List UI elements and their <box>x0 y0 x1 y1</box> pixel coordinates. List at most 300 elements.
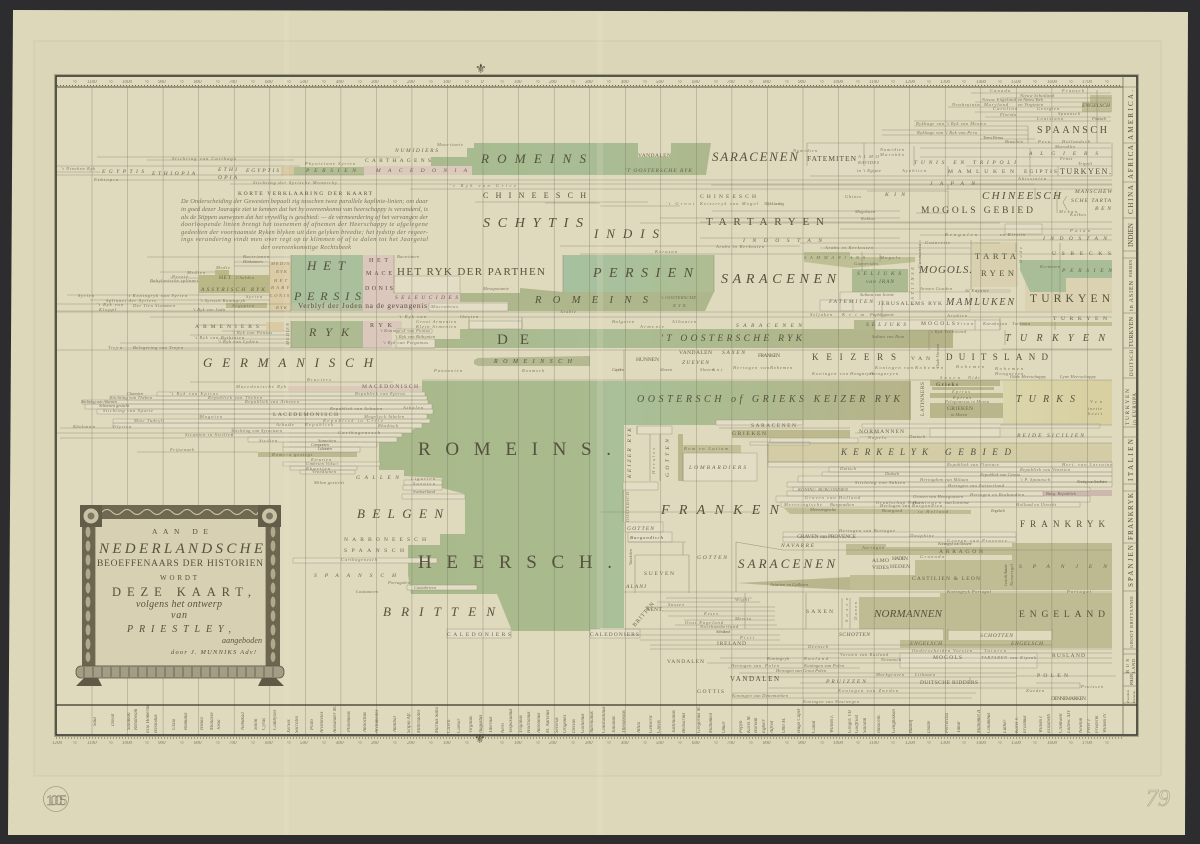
region names: Asia rows: RYK <box>370 323 393 329</box>
bottom time scale: ½ <box>643 741 647 746</box>
top time scale: ½ <box>820 80 824 85</box>
region names: west Europe: MOGOLS <box>933 655 962 661</box>
block: Persis Ryk lower <box>291 321 363 348</box>
America labels: Louisiana <box>1036 116 1064 121</box>
region names: Africa row: Ethiopia <box>93 177 119 182</box>
region names: Africa row: OPIA <box>218 175 238 181</box>
region names: Europe upper rows: Stichting van Sparte <box>103 408 153 413</box>
region names: west Europe: Merovingische <box>809 507 836 512</box>
block: Aragon <box>846 544 1012 555</box>
region names: west Europe: Lithauen <box>914 672 936 677</box>
region names: Asia rows: Krim <box>841 312 865 317</box>
right column of geographic divisions: AMERICA. <box>1127 90 1135 140</box>
block: Castilien <box>850 560 1012 590</box>
region names: Asia rows: Arabie <box>559 309 576 314</box>
region names: Africa row: ROMEINS <box>480 151 586 166</box>
block: Persien <box>563 255 714 292</box>
pencil inventory stamp: 1005: 1005 <box>46 793 67 809</box>
region names: west Europe: Tataren <box>984 648 1007 653</box>
bottom band: names of rulers and scholars: Origenes <box>563 715 568 733</box>
America labels: Hollandsch <box>1061 139 1091 144</box>
region names: west Europe: 't P. Spaansch <box>1020 477 1051 482</box>
region names: west Europe: Graafschap Namen <box>876 500 925 505</box>
region names: Asia rows: CHINEESCH <box>700 194 756 200</box>
region names: Europe upper rows: Rhodisch <box>377 423 399 428</box>
region names: Asia rows: TURKYEN <box>1030 293 1111 305</box>
base gadroons <box>84 667 273 677</box>
region names: Europe upper rows: NARBONEESCH <box>344 537 426 543</box>
region names: Africa row: Numidien <box>879 147 905 152</box>
region names: Europe upper rows: Peloponesus in Morea <box>944 399 990 404</box>
bottom time scale: ½ <box>714 741 718 746</box>
America labels: Rykhage van 't Ryk van Mexico <box>915 121 987 126</box>
bottom time scale: 600 <box>692 741 700 746</box>
region names: Asia rows: Sultan van Rum <box>872 334 905 339</box>
region names: Europe upper rows: Pannonien <box>433 368 463 373</box>
region names: west Europe: Essex <box>703 611 718 616</box>
block: Kerkelyk Gebied <box>768 443 1112 462</box>
region names: Asia rows: Mogols <box>879 255 900 260</box>
dedication text: NEDERLANDSCHE <box>98 541 263 557</box>
region names: Asia rows: Syrien <box>78 293 95 298</box>
cartouche base <box>76 666 284 678</box>
region names: Europe upper rows: Bohemen <box>995 366 1024 371</box>
bottom band: names of rulers and scholars: Romulus <box>184 712 189 731</box>
America labels: Fransch <box>1091 116 1107 121</box>
region names: Asia rows: TURKYEN <box>1053 316 1107 322</box>
block: Persien Africa <box>294 167 364 175</box>
bottom band: names of rulers and scholars: Salomon <box>127 712 132 730</box>
block: Macedonisch pink <box>288 386 422 391</box>
region names: Africa row: ETHIOPIA <box>151 171 196 177</box>
bottom band: names of rulers and scholars: Gregorius M. <box>697 706 702 733</box>
top time scale: ½ <box>856 80 860 85</box>
region names: west Europe: VANDALEN <box>667 659 704 665</box>
region names: Europe upper rows: inetie <box>1088 406 1102 411</box>
frame <box>54 74 1138 738</box>
region names: Europe upper rows: Republiek van Theben <box>207 395 263 400</box>
vertical year lines <box>92 87 1087 735</box>
top time scale: 1700 <box>1082 80 1092 85</box>
right column of geographic divisions: FRANKRYK <box>1127 493 1135 540</box>
region names: Asia rows: TARTA <box>975 251 1017 261</box>
America labels: Rykhage van 't Ryk van Peru <box>916 130 978 135</box>
bottom band: names of rulers and scholars: Attila <box>637 721 642 734</box>
bottom band: names of rulers and scholars: Genghiskan <box>892 709 897 733</box>
region names: west Europe: VIDES <box>872 565 889 571</box>
region names: Europe upper rows: Lusitanieen <box>355 589 379 594</box>
block: Romeins Africa <box>431 143 711 175</box>
colour blocks of the empires <box>199 95 1112 648</box>
region names: Asia rows: Mogolsten <box>854 209 876 214</box>
region names: Asia rows: RYK <box>275 305 288 310</box>
bottom band: names of rulers and scholars: Tiberius <box>489 717 494 733</box>
bottom band: names of rulers and scholars: Justinianus <box>672 710 677 733</box>
dedication text: WORDT <box>160 574 198 582</box>
region names: Europe upper rows: CALEDONIERS <box>590 632 639 638</box>
region names: Asia rows: Patan <box>1069 228 1091 233</box>
America labels: Nieuw Engeland <box>981 97 1017 102</box>
region names: Europe upper rows: Macedonische Ryk <box>235 384 287 389</box>
bottom band: names of rulers and scholars: Augustus <box>479 715 484 734</box>
region names: Africa row: SARACENEN <box>712 149 799 164</box>
bottom band: names of rulers and scholars: Cicero <box>447 719 452 733</box>
region names: Asia rows: MOGOLS <box>921 321 955 327</box>
region names: Asia rows: RYK <box>275 269 288 274</box>
region names: Asia rows: Kloppl <box>98 307 117 312</box>
top time scale: 900 <box>798 80 806 85</box>
bottom time scale: ½ <box>820 741 824 746</box>
region names: Europe upper rows: Carthagenesch <box>338 430 381 435</box>
region names: Asia rows: TARTARYEN <box>706 216 824 228</box>
region names: Africa row: 'T OOSTERSCHE RYK <box>625 168 692 174</box>
region names: Europe upper rows: Venedianen <box>312 469 337 474</box>
bottom band: names of rulers and scholars: David <box>111 713 116 727</box>
region names: west Europe: Portugal <box>1066 589 1092 594</box>
region names: west Europe: HADEN <box>892 556 908 562</box>
bottom band: names of rulers and scholars: Pepyn <box>739 720 744 734</box>
region names: west Europe: Republiek van Venetien <box>1019 467 1071 472</box>
America labels: Terra Firma <box>983 135 1004 140</box>
explanation body: De Onderscheiding der Gewesten bepaalt zig tusschen twee parallele kaplinie-linien; om daar <box>180 198 428 205</box>
bottom time scale: 700 <box>229 741 237 746</box>
region names: west Europe: FRANKEN <box>660 503 780 518</box>
block: Egypt small <box>281 167 294 175</box>
region names: west Europe: Engelsch <box>990 508 1006 513</box>
region names: Asia rows: Armenie <box>639 324 664 329</box>
region names: Asia rows: JERUSALEMS RYK <box>878 301 942 307</box>
block: Normannen Engeland <box>859 593 1112 648</box>
region names: Asia rows: Bulgaren <box>612 319 635 324</box>
top time scale: 1000 <box>122 80 132 85</box>
bottom band: names of rulers and scholars <box>93 705 1108 734</box>
bottom time scale: ½ <box>145 741 149 746</box>
region names: west Europe: Oost Engeland <box>685 620 724 625</box>
right column of geographic divisions: ITALIEN <box>1127 439 1135 481</box>
bottom band: names of rulers and scholars: Karel V. <box>1015 717 1020 734</box>
America labels: Marokko <box>1054 144 1076 149</box>
region names: west Europe <box>625 423 1112 704</box>
region names: Europe upper rows: Portugalen <box>387 580 411 585</box>
block: Spanjen <box>1012 543 1112 590</box>
region names: west Europe: ENGELAND <box>1019 610 1105 620</box>
right column of geographic divisions: POLEN <box>1130 674 1134 685</box>
top time scale: 1600 <box>1047 80 1058 85</box>
bottom time scale: 300 <box>371 741 379 746</box>
region names: Asia rows: 't Ryk Liaoting <box>764 201 785 206</box>
region names: west Europe: SARACENEN <box>751 423 796 429</box>
bottom band: names of rulers and scholars: Otto M. <box>782 717 787 733</box>
region names: Europe upper rows: VAN <box>911 356 930 362</box>
top time scale: 700 <box>727 80 735 85</box>
bottom band: names of rulers and scholars: Julianus <box>612 716 617 733</box>
region names: Europe upper rows: Oude Heerschappy <box>1010 374 1047 379</box>
bottom time scale: ½ <box>429 741 433 746</box>
bottom band: names of rulers and scholars: Egbert <box>762 719 767 734</box>
cartouche: dedication title <box>76 505 284 686</box>
vertical block labels: Leon & Asturie <box>1003 564 1008 587</box>
bottom time scale: 200 <box>407 741 415 746</box>
bottom time scale: ½ <box>1033 741 1037 746</box>
wedge: Asturien <box>737 577 850 590</box>
region names: Asia rows: PERSIEN <box>1061 268 1112 274</box>
right column of geographic divisions: LAND <box>1131 658 1136 673</box>
region names: west Europe: Koningen van Zweden <box>837 688 899 693</box>
pale bars for the smaller states <box>82 224 1112 668</box>
region names: west Europe: TARTAREN van Kipzak <box>981 655 1037 660</box>
region names: Europe upper rows: Sicanien in Sicilien <box>185 432 234 437</box>
region names: west Europe: Hertogen en Brabandten <box>969 492 1025 497</box>
bottom band: names of rulers and scholars: Belisarius <box>682 713 687 733</box>
region names: Asia rows: Medien <box>186 270 206 275</box>
region names: Europe upper rows: OOSTERSCH of GRIEKS KEIZER RYK <box>637 394 901 405</box>
region names: west Europe: NAVARRE <box>780 543 815 549</box>
America labels: Brasilien <box>1005 139 1024 144</box>
region names: Europe upper rows: Hongaryen <box>849 371 875 376</box>
bottom time scale: 1200 <box>52 741 62 746</box>
region names: Europe upper rows: Chamien <box>127 391 144 396</box>
region names: Europe upper rows: Ligurien <box>410 476 436 481</box>
right column of geographic divisions: in EUROPA <box>1133 393 1138 425</box>
right column of geographic divisions: TURKYEN <box>1129 316 1135 347</box>
region names: west Europe: SUEVEN <box>644 571 674 577</box>
region names: Asia rows: Verblyf der Joden na de gevangenis <box>298 301 427 310</box>
region names: Europe upper rows: TURKS <box>1016 394 1075 405</box>
region names: west Europe: GRIEKEN <box>732 431 766 437</box>
bottom band: names of rulers and scholars: Lodew. XIV <box>1067 709 1072 734</box>
region names: Asia rows: 't Ryk van Pontus <box>232 330 272 335</box>
bottom time scale: 1000 <box>122 741 132 746</box>
bottom band: names of rulers and scholars: Hugo Capet <box>797 708 802 734</box>
block: Turks yellow <box>1003 380 1112 425</box>
region names: Europe upper rows: Bohemen <box>915 365 944 370</box>
region names: Asia rows: RYK <box>308 325 350 339</box>
region names: Europe upper rows: Hongaryen <box>994 371 1024 376</box>
dedication text: DEZE KAART, <box>112 585 251 599</box>
vertical block labels: Danen <box>853 601 858 621</box>
region names: Asia rows: HET <box>306 258 346 273</box>
region names: west Europe: GRAVEN van PROVENCE <box>797 534 857 540</box>
explanation text block <box>180 191 428 251</box>
region names: Asia rows: MAMLUKEN <box>945 297 1015 308</box>
top time scale: ½ <box>465 80 469 85</box>
explanation body: ings verandering vindt men over regt op te klimmen of af te dalen tot het Jaargetal <box>181 236 428 243</box>
region names: Asia rows: CHINEESCH <box>483 191 586 200</box>
region names: west Europe: Onderscheiden Vorsten <box>912 648 973 653</box>
bottom band: names of rulers and scholars: Nebukad <box>241 712 246 731</box>
region names: Europe upper rows: Koningen van <box>874 365 914 370</box>
bottom band: names of rulers and scholars: Willem IV <box>1103 712 1108 733</box>
region names: Europe upper rows: MACEDONISCH <box>362 384 418 390</box>
top time scale: ½ <box>607 80 611 85</box>
bottom time scale: 100 <box>443 741 451 746</box>
vertical block labels: Oude Vorsten <box>935 343 940 368</box>
region names: west Europe: Sussex <box>668 602 684 607</box>
region names: Europe upper rows: Republiek van Achaien <box>329 406 383 411</box>
region names: Europe upper rows: Achaike <box>275 422 294 427</box>
region names: west Europe: Hertogen van Zwitserland <box>947 483 1005 488</box>
region names: Europe upper rows: GERMANISCH <box>203 355 374 370</box>
region names: west Europe: CASTILIEN & LEON <box>912 576 980 582</box>
bottom band: names of rulers and scholars: Cambyses <box>273 710 278 730</box>
region names: Europe upper rows: Republiek van Athenen <box>244 399 300 404</box>
region names: Asia rows: BEN <box>1095 206 1111 212</box>
region names: Europe upper rows: Umbrien Volsci <box>306 461 339 466</box>
region names: Asia rows: ASSYRISCH RYK <box>200 287 265 293</box>
region names: Asia rows: SELJUKS <box>857 271 901 277</box>
region names: Asia rows: Bactrianen <box>243 254 270 259</box>
region names: Asia rows: CHINEESCH <box>982 190 1062 202</box>
vertical block labels: Vandalen <box>628 548 633 565</box>
block: Macedonian pink lower <box>363 321 402 348</box>
bottom band: names of rulers and scholars: Petrarcha <box>945 712 950 734</box>
region names: Europe upper rows: bezit <box>1088 411 1103 416</box>
bottom band: names of rulers and scholars: Mahomet II <box>977 709 982 734</box>
region names: west Europe: Hertogen <box>912 500 942 505</box>
region names: Europe upper rows: DUITSLAND <box>946 352 1048 362</box>
bottom time scale: ½ <box>393 741 397 746</box>
bottom band: names of rulers and scholars: Severus <box>555 717 560 733</box>
region names: Europe upper rows: Magnien <box>199 414 223 419</box>
region names: west Europe: Stichting van Saksen <box>855 480 906 485</box>
region names: west Europe: ALMO <box>872 558 889 564</box>
region names: Asia rows: MACE <box>366 271 392 277</box>
region names: Asia rows: Babylonische splinnet <box>150 278 199 283</box>
bottom time scale: ½ <box>358 741 362 746</box>
region names: Europe upper rows: Switserland <box>413 489 436 494</box>
America labels: Georgien <box>1037 106 1060 111</box>
region names: Asia rows: Kalkas <box>1069 212 1086 217</box>
region names: Asia rows: Splinnet der Syriers <box>106 298 156 303</box>
region names: Africa row: Ayubiten <box>901 168 927 173</box>
region names: Asia rows: en Kirstin <box>1000 232 1026 237</box>
bottom band: names of rulers and scholars: Peter I <box>1087 719 1092 734</box>
region names: Asia rows: Sultans van Iconie <box>860 292 894 297</box>
frieze wave <box>102 510 258 514</box>
bottom time scale: ½ <box>500 741 504 746</box>
top time scale: 1400 <box>976 80 986 85</box>
region names: Africa row: EGIPTIS <box>1024 169 1057 175</box>
region names: Africa row: Mauritanie <box>436 142 463 147</box>
region names: west Europe: ENGELSCH <box>909 641 943 647</box>
block: Het Persis Ryk <box>291 255 363 303</box>
region names: Asia rows: van IRAN <box>866 279 894 285</box>
block: main Romeins Heersch <box>379 381 911 631</box>
region names: Asia rows: Chaldea <box>236 275 255 280</box>
bottom band: names of rulers and scholars: Scipio Afr. <box>407 712 412 733</box>
top time scale: 200 <box>407 80 415 85</box>
region names: west Europe: Koningen van Denemarken <box>731 693 789 698</box>
vertical block labels: Herules <box>651 448 656 475</box>
region names: Africa row: Stichting der Syrische Monarchy <box>253 180 338 185</box>
region names: Asia rows: Karakoyun <box>982 321 1008 326</box>
region names: Asia rows: Turkman <box>1012 321 1031 326</box>
region names: Europe upper rows: CALEDONIERS <box>447 632 511 638</box>
block: Saraceen olive <box>732 430 850 438</box>
region names: Asia rows: DONIS <box>365 286 393 292</box>
top time scale: 900 <box>158 80 166 85</box>
region names: Europe upper rows: Kholonien <box>72 424 96 429</box>
region names: west Europe: Koningryk <box>766 656 790 661</box>
top time scale: ½ <box>500 80 504 85</box>
bottom time scale: 1500 <box>1011 741 1022 746</box>
bottom band: names of rulers and scholars: Socrates <box>295 716 300 733</box>
bottom band: names of rulers and scholars: Alfred <box>770 720 775 734</box>
top time scale: 0 <box>481 80 484 85</box>
region names: west Europe: SCHOTTEN <box>980 633 1013 639</box>
region names: Asia rows: Der Tien Stammen <box>132 303 176 308</box>
region names: Europe upper rows: Grieks <box>936 382 959 388</box>
region names: Asia rows: 't Ryk van Lydien <box>218 339 259 344</box>
chart field <box>56 76 1137 735</box>
bottom time scale: ½ <box>927 741 931 746</box>
region names: Europe upper rows: Bruciers <box>307 377 331 382</box>
region names: west Europe: Pruissen <box>1080 684 1104 689</box>
region names: Asia rows: INDOSTAN <box>1042 236 1107 242</box>
vertical block labels: Carmania <box>917 243 922 268</box>
region names: Asia rows: 't Ryk van Pergamus <box>383 340 428 345</box>
region names: Europe upper rows: Saxen <box>940 375 961 380</box>
right column of geographic divisions: SPANJEN <box>1127 545 1135 587</box>
region names: Asia rows: Belegering van Trojen <box>133 345 184 350</box>
region names: Asia rows: Hirkaniers <box>242 259 263 264</box>
region names: west Europe: Koningen van Polen <box>803 663 845 668</box>
region names: west Europe: Hertogen van <box>730 663 762 668</box>
region names: Europe upper rows: Koningen van <box>811 371 849 376</box>
bottom band: names of rulers and scholars: Saladin <box>863 717 868 733</box>
region names: Asia rows: Klein Armenien <box>415 324 457 329</box>
block: De Oostersche Ryk <box>435 329 953 348</box>
region names: Asia rows: Trojen <box>108 345 123 350</box>
region names: Europe upper rows: GRIEKEN <box>947 406 973 412</box>
bottom band: names of rulers and scholars: Mahomed <box>709 713 714 734</box>
explanation body: als de Stippen aanwyzen dat het vrywillig is geschied: — de vermeerdering of het vervangen der <box>181 214 428 221</box>
region names: Europe upper rows: Ant <box>711 367 723 372</box>
right column of geographic divisions <box>1123 87 1138 703</box>
region names: Asia rows: MOGOLS GEBIED <box>921 206 1033 216</box>
top time scale: ½ <box>785 80 789 85</box>
right column of geographic divisions: TURKYEN <box>1125 389 1131 425</box>
region names: Europe upper rows: Stichting van Athenen <box>81 399 118 404</box>
region names: west Europe: GOTTEN <box>697 555 727 561</box>
bottom band: names of rulers and scholars: Newton <box>1079 717 1084 734</box>
region names: west Europe: Holland en Utrecht <box>1015 502 1057 507</box>
region names: west Europe: SARACENEN <box>738 556 836 571</box>
bottom band: names of rulers and scholars: Alexander M. <box>333 706 338 734</box>
top time scale: ½ <box>1033 80 1037 85</box>
region names: west Europe: in Holland <box>918 509 949 514</box>
region names: west Europe: FRANKRYK <box>1020 519 1106 529</box>
vertical block labels: Oude <box>1018 247 1023 263</box>
bottom time scale: 1700 <box>1082 741 1092 746</box>
region names: Asia rows: ROMEINS <box>534 295 649 306</box>
top time scale: ½ <box>322 80 326 85</box>
region names: Europe upper rows: Sicilien <box>259 438 278 443</box>
region names: west Europe: Koning van Sardinien <box>1076 479 1108 484</box>
region names: Asia rows: USBECKS <box>1052 251 1111 257</box>
block: Sammanians olive <box>804 252 915 268</box>
bottom band: names of rulers and scholars: Antiochus <box>363 712 368 733</box>
bottom band: names of rulers and scholars: Willem I <box>1039 716 1044 733</box>
region names: Asia rows: MANSCHEW <box>1074 189 1113 195</box>
bottom band: names of rulers and scholars: Hiskia <box>200 716 205 731</box>
region names: Europe upper rows: Nidr <box>967 375 980 380</box>
top time scale: 800 <box>194 80 202 85</box>
region names: Africa row: ALGIERS <box>1028 151 1098 157</box>
region names: Europe upper rows: Republiek van Epirus <box>354 391 405 396</box>
region names: Asia rows: ROMEINSCH <box>493 359 573 365</box>
top time scale: ½ <box>962 80 966 85</box>
